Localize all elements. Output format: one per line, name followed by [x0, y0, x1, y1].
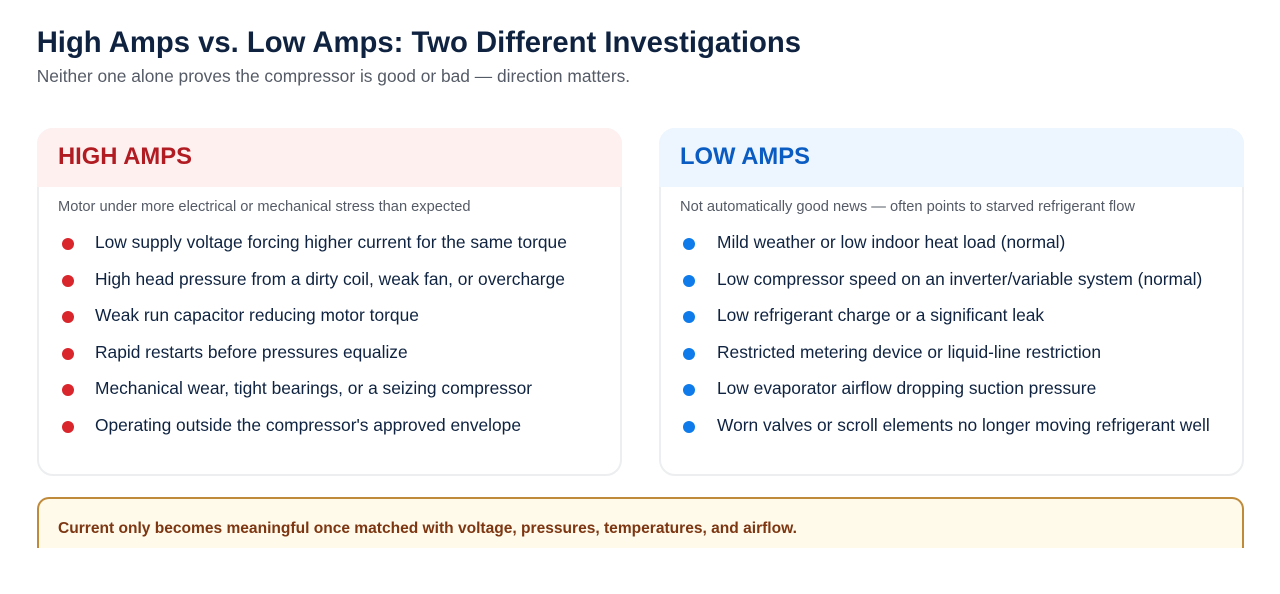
panel: high amps — [37, 128, 622, 476]
list item: high head pressure: High head pressure from a dirty coil, weak fan, or overcharge — [95, 269, 565, 289]
list item: mild weather: Mild weather or low indoor heat load (normal) — [717, 232, 1065, 252]
list item: restricted metering device: Restricted metering device or liquid-line restriction — [717, 342, 1101, 362]
list item: mechanical wear: Mechanical wear, tight bearings, or a seizing compressor — [95, 378, 532, 398]
list item: weak run capacitor: Weak run capacitor reducing motor torque — [95, 305, 419, 325]
list item: low supply voltage: Low supply voltage forcing higher current for the same torque — [95, 232, 567, 252]
description: low amps: Not automatically good news — often points to starved refrigerant flow — [680, 199, 1135, 215]
list item: rapid restarts: Rapid restarts before pressures equalize — [95, 342, 408, 362]
heading: high amps — [37, 128, 622, 187]
heading: high amps: HIGH AMPS — [58, 143, 192, 170]
list item: worn valves: Worn valves or scroll elements no longer moving refrigerant well — [717, 415, 1210, 435]
description: high amps: Motor under more electrical or mechanical stress than expected — [58, 199, 471, 215]
heading: low amps: LOW AMPS — [680, 143, 810, 170]
list item: low compressor speed: Low compressor speed on an inverter/variable system (normal) — [717, 269, 1202, 289]
panel: low amps — [659, 128, 1244, 476]
heading: low amps — [659, 128, 1244, 187]
callout: Current only becomes meaningful once matched with voltage, pressures, temperatures, and airflow. — [58, 520, 797, 537]
title: High Amps vs. Low Amps: Two Different Investigations — [37, 27, 801, 59]
list item: low refrigerant charge: Low refrigerant charge or a significant leak — [717, 305, 1044, 325]
subtitle: Neither one alone proves the compressor is good or bad — direction matters. — [37, 66, 630, 86]
list item: outside envelope: Operating outside the compressor's approved envelope — [95, 415, 521, 435]
list item: low evaporator airflow: Low evaporator airflow dropping suction pressure — [717, 378, 1096, 398]
callout — [37, 497, 1244, 548]
